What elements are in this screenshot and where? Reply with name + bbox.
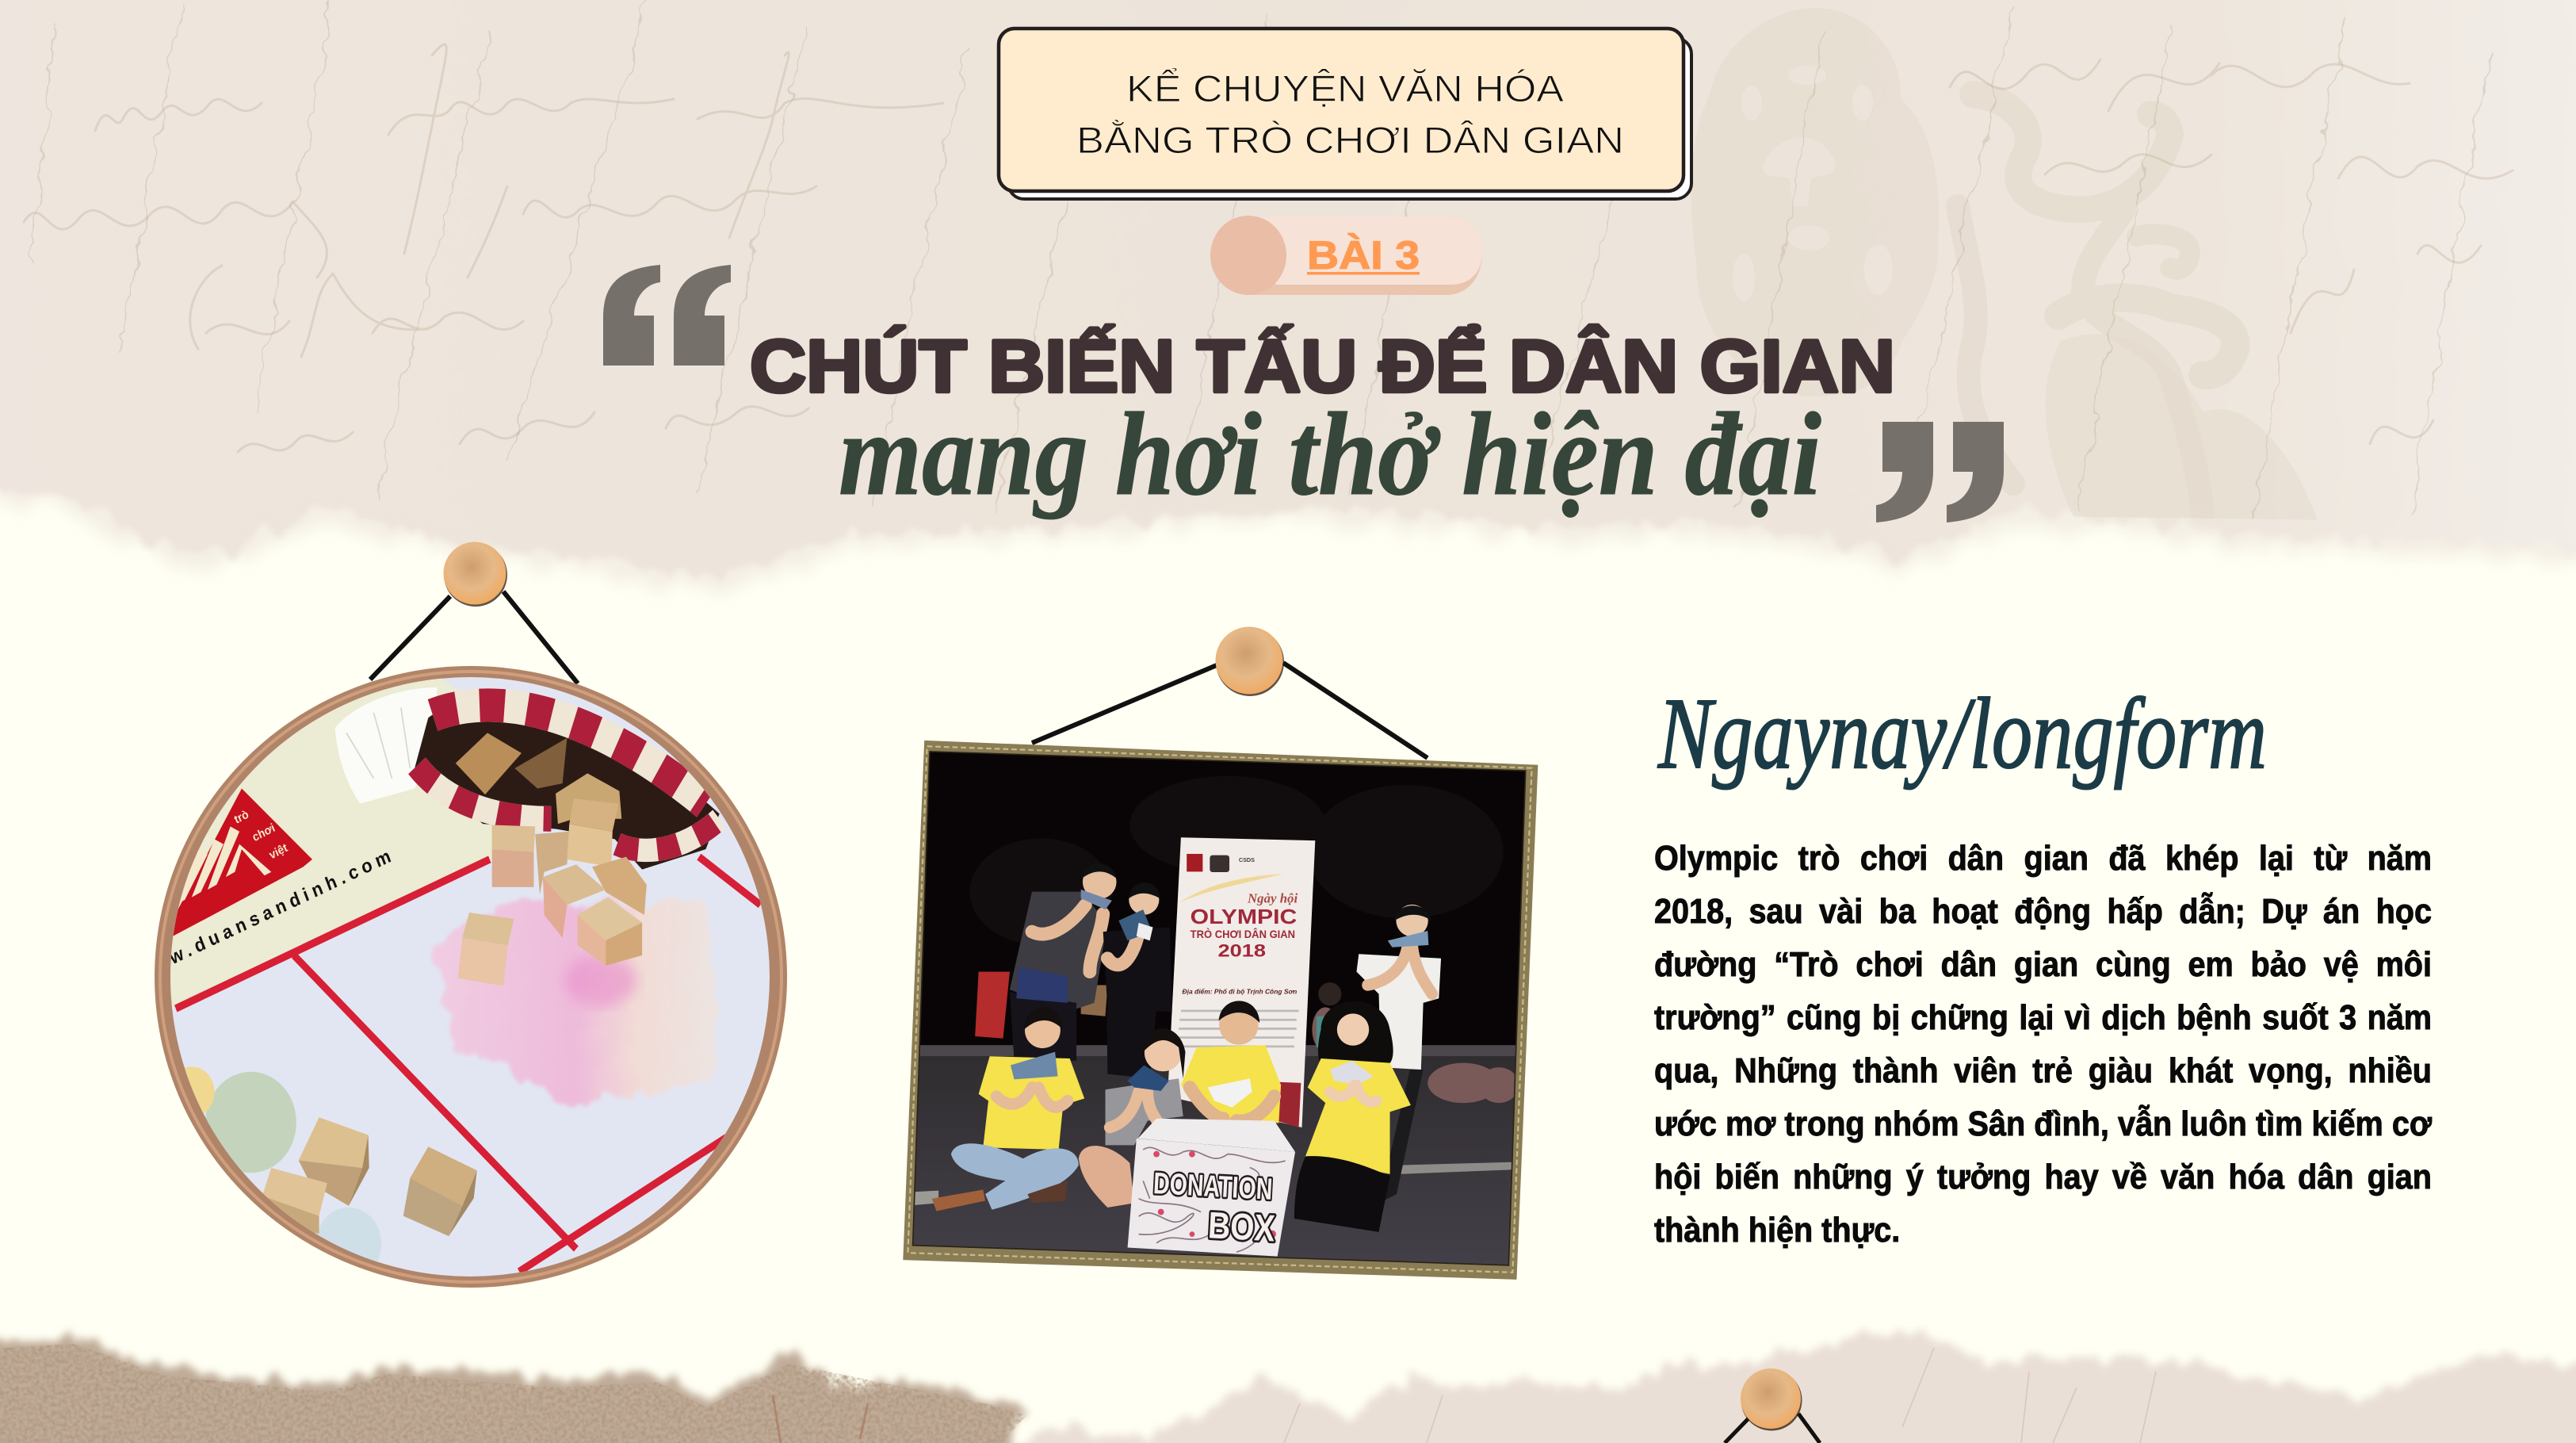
- framed photo of the team: CSDS: [1239, 856, 1255, 863]
- body text: qua, Những thành viên trẻ giàu khát vọng, nhiều: [1654, 1051, 2432, 1090]
- printed circles: [205, 1072, 296, 1173]
- body text: trường” cũng bị chững lại vì dịch bệnh suốt 3 năm: [1654, 998, 2432, 1037]
- white cloth tassel: [335, 687, 438, 804]
- heading: Ngaynay/longform: Ngaynay/longform: [1657, 677, 2267, 790]
- front row people: [932, 1001, 1411, 1232]
- framed photo of the team: Địa điểm: Phố đi bộ Trịnh Công Sơn: [1183, 989, 1298, 996]
- body text: [1654, 839, 2432, 1250]
- street: [899, 1056, 1530, 1279]
- red board lines: [176, 857, 760, 1272]
- red logo block: việt: [267, 841, 290, 863]
- website text: w.duansandinh.com: [166, 844, 396, 969]
- hanging string: [1032, 663, 1428, 758]
- icon: opening quote mark: [603, 265, 731, 366]
- donation box: [1128, 1119, 1295, 1257]
- side poster and crowd: [975, 972, 1010, 1039]
- title line 1: KỂ CHUYỆN VĂN HÓA: [1126, 67, 1565, 109]
- body text: ước mơ trong nhóm Sân đình, vẫn luôn tìm kiếm cơ: [1654, 1104, 2432, 1143]
- framed photo of the team: TRÒ CHƠI DÂN GIAN: [1191, 928, 1295, 940]
- framed photo of the team: 2018: [1217, 941, 1266, 961]
- donation box: DONATION: [1152, 1166, 1273, 1207]
- striped cloth bag: [415, 699, 720, 870]
- heading: script subtitle: mang hơi thở hiện đại: [839, 388, 1821, 520]
- badge: BÀI 3: [1210, 216, 1482, 295]
- body text: Olympic trò chơi dân gian đã khép lại từ năm: [1654, 839, 2432, 878]
- red logo block: trò: [232, 808, 250, 827]
- framed photo of the team: Ngày hội: [1247, 891, 1298, 906]
- nail pin: left: [444, 542, 507, 607]
- framed photo of the team: [899, 663, 1538, 1280]
- wooden cubes: [262, 733, 647, 1236]
- back row people: [1010, 863, 1441, 1203]
- banner: [1168, 837, 1315, 1127]
- body text: hội biến những ý tưởng hay về văn hóa dân gian: [1654, 1158, 2432, 1196]
- bottom torn paper strip: [0, 1332, 2576, 1443]
- beige board corner: [170, 679, 494, 1009]
- hanging string: [370, 591, 578, 683]
- badge: BÀI 3: BÀI 3: [1307, 233, 1420, 278]
- body text: đường “Trò chơi dân gian cùng em bảo vệ môi: [1654, 945, 2432, 984]
- nail pin: bottom with string: [1725, 1368, 1820, 1443]
- heading: main title: CHÚT BIẾN TẤU ĐỂ DÂN GIAN: [750, 323, 1895, 408]
- faint handwriting: [24, 44, 2513, 452]
- damask ornament: [1691, 8, 2318, 523]
- round mirror photo of board game: [146, 591, 793, 1304]
- red logo block: chơi: [250, 821, 277, 844]
- donation box: BOX: [1207, 1204, 1276, 1249]
- top torn paper background: [0, 0, 2576, 592]
- title box: [999, 29, 1691, 199]
- pink water stain: [433, 900, 717, 1102]
- tree silhouettes: [969, 776, 1504, 945]
- icon: closing quote mark: [1876, 422, 2004, 522]
- red logo block: [146, 789, 312, 951]
- title line 2: BẰNG TRÒ CHƠI DÂN GIAN: [1076, 119, 1624, 161]
- nail pin: centre: [1216, 626, 1284, 696]
- framed photo of the team: OLYMPIC: [1191, 906, 1297, 928]
- body text: thành hiện thực.: [1654, 1211, 1900, 1250]
- body text: 2018, sau vài ba hoạt động hấp dẫn; Dự án học: [1654, 892, 2432, 931]
